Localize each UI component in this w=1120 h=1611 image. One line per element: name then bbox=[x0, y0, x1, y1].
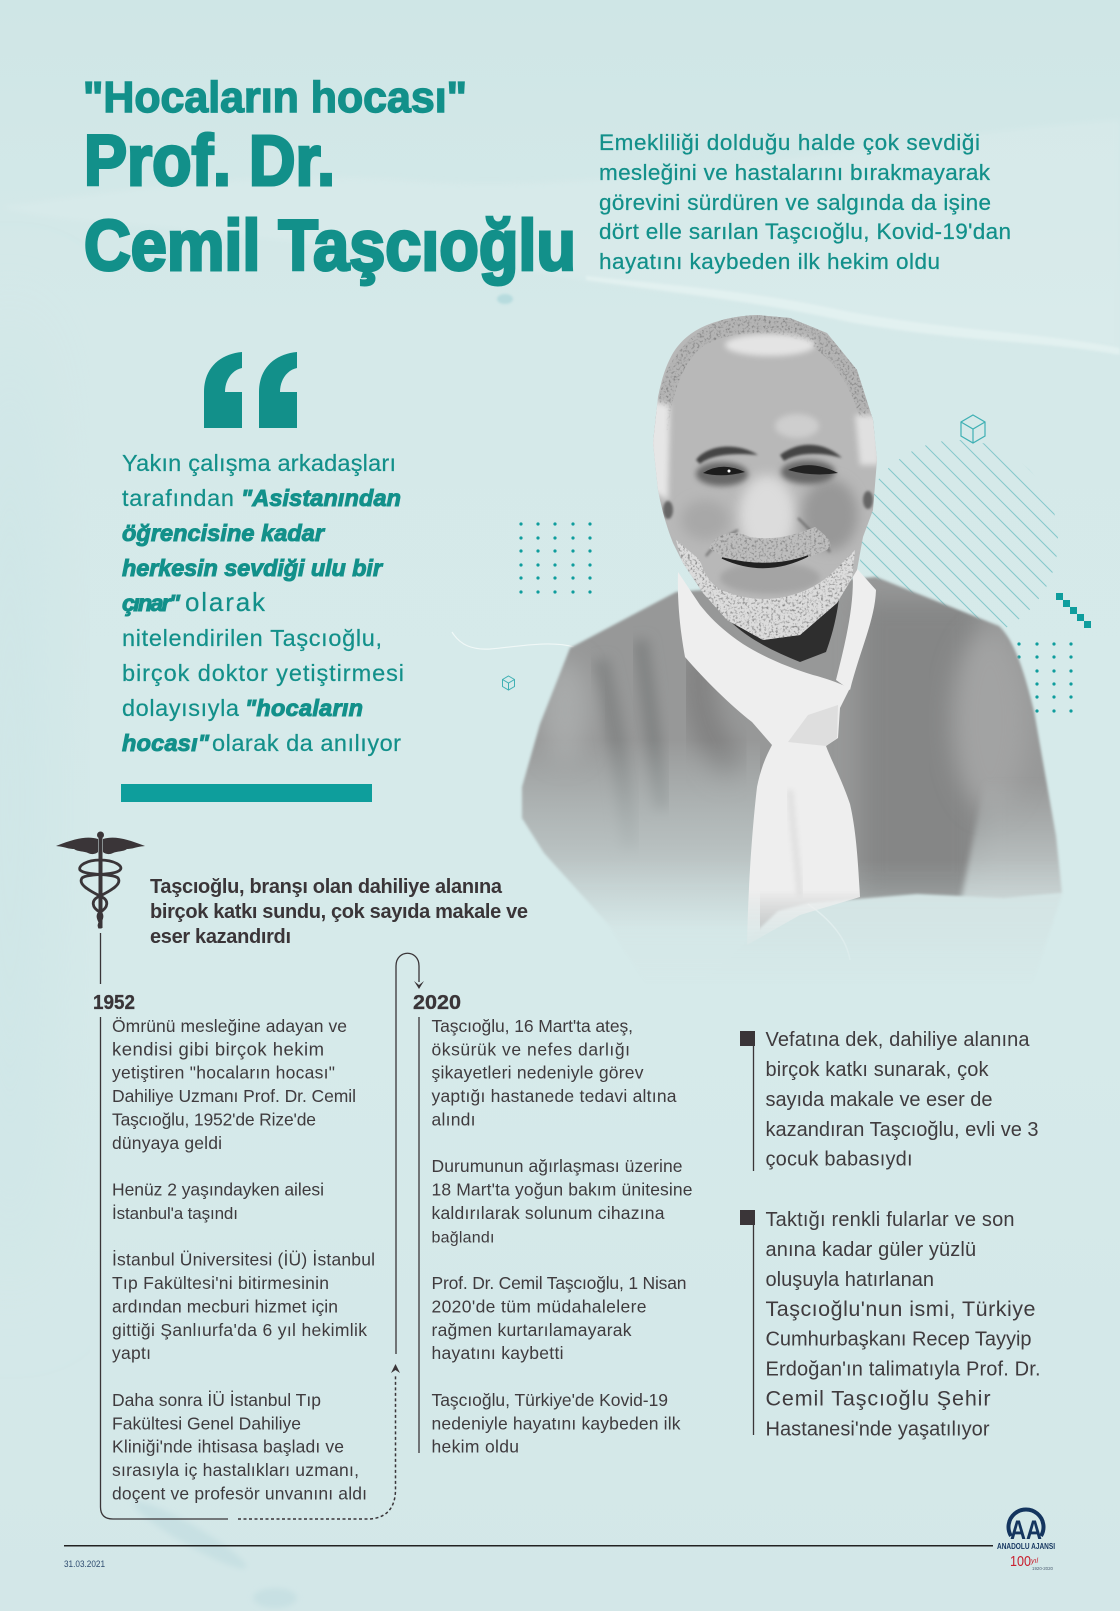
photo: hair bbox=[650, 312, 880, 440]
logo: Anadolu Ajansı: 1920-2020 bbox=[1032, 1566, 1053, 1571]
year 1952: 1952 bbox=[93, 992, 135, 1014]
quote text: öğrencisine kadar bbox=[122, 520, 326, 546]
text block: 2020 timeline: nedeniyle hayatını kaybeden ilk bbox=[432, 1413, 681, 1433]
teal bar bbox=[121, 784, 372, 802]
quote text: birçok doktor yetiştirmesi bbox=[122, 660, 404, 686]
title bbox=[83, 73, 576, 286]
quote text: hocası" bbox=[122, 730, 210, 756]
text block: 1952 timeline: gittiği Şanlıurfa'da 6 yıl hekimlik bbox=[112, 1320, 367, 1340]
logo: Anadolu Ajansı: yıl bbox=[1030, 1558, 1038, 1565]
bullet block: legacy: Cumhurbaşkanı Recep Tayyip bbox=[766, 1329, 1032, 1351]
arrow: down to 2020 bbox=[414, 981, 424, 989]
footer rule bbox=[64, 1545, 993, 1546]
timeline connector lines bbox=[100, 933, 419, 1519]
photo: eye sockets bbox=[696, 462, 748, 486]
photo: head bbox=[648, 312, 880, 650]
intro text: dört elle sarılan Taşcıoğlu, Kovid-19'dan bbox=[599, 219, 1011, 244]
quote text: "hocaların bbox=[245, 695, 363, 721]
quote text: nitelendirilen Taşcıoğlu, bbox=[122, 625, 382, 651]
photo: mouth bbox=[722, 556, 808, 568]
bullet block: family: kazandıran Taşcıoğlu, evli ve 3 bbox=[766, 1119, 1038, 1141]
photo: moustache bbox=[709, 527, 830, 565]
logo: Anadolu Ajansı: 100 bbox=[1010, 1553, 1031, 1570]
text block: 2020 timeline: hayatını kaybetti bbox=[432, 1343, 564, 1363]
bullet block: legacy: Taşcıoğlu'nun ismi, Türkiye bbox=[766, 1297, 1036, 1321]
intro text: mesleğini ve hastalarını bırakmayarak bbox=[599, 160, 991, 185]
logo: Anadolu Ajansı: ANADOLU AJANSI bbox=[997, 1541, 1055, 1551]
text block: 2020 timeline: Taşcıoğlu, Türkiye'de Kovid-19 bbox=[432, 1390, 668, 1410]
text block: 2020 timeline: yaptığı hastanede tedavi altına bbox=[432, 1086, 677, 1106]
text block: 2020 timeline: şikayetleri nedeniyle görev bbox=[432, 1063, 644, 1083]
quote text: çınar" bbox=[122, 590, 181, 616]
text block: 2020 timeline: 18 Mart'ta yoğun bakım ünitesine bbox=[432, 1180, 692, 1200]
text block: 1952 timeline: Henüz 2 yaşındayken ailesi bbox=[112, 1180, 324, 1200]
text block: 1952 timeline: Kliniği'nde ihtisasa başladı ve bbox=[112, 1437, 344, 1457]
subheading text bbox=[150, 876, 528, 948]
logo: Anadolu Ajansı: AA bbox=[1010, 1515, 1042, 1545]
text block: 1952 timeline: Tıp Fakültesi'ni bitirmesinin bbox=[112, 1273, 329, 1293]
text block: 1952 timeline: İstanbul Üniversitesi (İÜ) İstanbul bbox=[112, 1250, 375, 1270]
title name line 2: Cemil Taşcıoğlu bbox=[84, 207, 576, 286]
bullet block: family: birçok katkı sunarak, çok bbox=[766, 1059, 990, 1081]
text block: 2020 timeline: öksürük ve nefes darlığı bbox=[432, 1039, 630, 1059]
decor: thin white curve bbox=[452, 632, 574, 649]
text block: 1952 timeline: Ömrünü mesleğine adayan ve bbox=[112, 1016, 347, 1036]
photo: face base bbox=[653, 315, 877, 640]
text block: 1952 timeline: İstanbul'a taşındı bbox=[112, 1204, 238, 1223]
text block: 1952 timeline: sırasıyla iç hastalıkları uzmanı, bbox=[112, 1460, 359, 1480]
intro text: görevini sürdüren ve salgında da işine bbox=[599, 190, 991, 215]
arrow: up from dotted line bbox=[391, 1364, 400, 1373]
text block: 1952 timeline: Daha sonra İÜ İstanbul Tıp bbox=[112, 1390, 321, 1410]
decor: diagonal squares bbox=[1056, 593, 1091, 628]
quote text: tarafından bbox=[122, 485, 234, 511]
text block: 1952 timeline: kendisi gibi birçok hekim bbox=[112, 1038, 324, 1059]
bullet block: family bbox=[740, 1029, 1038, 1171]
quote text bbox=[122, 450, 404, 756]
bullet block: family: sayıda makale ve eser de bbox=[766, 1089, 992, 1111]
subheading with caduceus bbox=[56, 832, 528, 948]
text block: 2020 timeline: alındı bbox=[432, 1110, 476, 1130]
icon: caduceus bbox=[56, 832, 145, 928]
date: 31.03.2021 bbox=[64, 1559, 105, 1570]
text block: 2020 timeline: Prof. Dr. Cemil Taşcıoğlu, 1 Nisan bbox=[432, 1273, 686, 1293]
quote text: "Asistanından bbox=[241, 485, 401, 511]
text block: 1952 timeline: Taşcıoğlu, 1952'de Rize'de bbox=[112, 1110, 316, 1130]
intro text bbox=[599, 130, 1011, 274]
icon: small cube bbox=[502, 676, 514, 690]
decor: right dot grid bbox=[1017, 642, 1073, 713]
text block: 2020 timeline: Taşcıoğlu, 16 Mart'ta ateş, bbox=[432, 1016, 633, 1036]
photo: dark neck bbox=[722, 590, 840, 662]
photo: eyebrows bbox=[696, 447, 758, 464]
decor: left dot grid bbox=[519, 522, 592, 594]
intro text: Emekliliği dolduğu halde çok sevdiği bbox=[599, 130, 980, 155]
text block: 1952 timeline: dünyaya geldi bbox=[112, 1133, 222, 1153]
text block: 2020 timeline: 2020'de tüm müdahalelere bbox=[432, 1296, 646, 1316]
photo: nose and smile creases bbox=[706, 518, 830, 556]
text block: 2020 timeline: rağmen kurtarılamayarak bbox=[432, 1320, 632, 1340]
photo: ear shadows bbox=[663, 501, 673, 519]
text block: 1952 timeline: ardından mecburi hizmet için bbox=[112, 1296, 338, 1316]
photo: sweater and arms bbox=[520, 576, 1062, 940]
bullet block: legacy: Erdoğan'ın talimatıyla Prof. Dr. bbox=[766, 1359, 1040, 1381]
bullet block: family: Vefatına dek, dahiliye alanına bbox=[766, 1029, 1030, 1051]
decor: diagonal hatch circle bbox=[860, 440, 1058, 628]
photo: beard bbox=[676, 540, 855, 650]
title kicker: "Hocaların hocası" bbox=[83, 73, 467, 122]
photo: eyes bbox=[703, 467, 745, 475]
subheading text: Taşcıoğlu, branşı olan dahiliye alanına bbox=[150, 876, 503, 898]
text block: 2020 timeline: hekim oldu bbox=[432, 1437, 519, 1457]
text block: 1952 timeline: yaptı bbox=[112, 1343, 151, 1363]
text block: 1952 timeline: Fakültesi Genel Dahiliye bbox=[112, 1413, 301, 1433]
text block: 2020 timeline: bağlandı bbox=[432, 1229, 494, 1246]
text block: 1952 timeline: yetiştiren "hocaların hocası" bbox=[112, 1063, 335, 1083]
text block: 1952 timeline bbox=[112, 1016, 375, 1503]
bullet block: legacy: oluşuyla hatırlanan bbox=[766, 1269, 934, 1291]
text block: 2020 timeline: kaldırılarak solunum cihazına bbox=[432, 1203, 665, 1223]
quote text: olarak da anılıyor bbox=[212, 730, 401, 756]
bullet block: legacy: Hastanesi'nde yaşatılıyor bbox=[766, 1418, 990, 1440]
year 2020: 2020 bbox=[413, 992, 461, 1014]
bullet block: family: çocuk babasıydı bbox=[766, 1149, 912, 1171]
quote text: olarak bbox=[185, 587, 266, 617]
subheading text: birçok katkı sundu, çok sayıda makale ve bbox=[150, 901, 528, 923]
photo: Cemil Taşcıoğlu portrait bbox=[500, 312, 1100, 1010]
title name line 1: Prof. Dr. bbox=[84, 122, 335, 201]
text block: 1952 timeline: doçent ve profesör unvanını aldı bbox=[112, 1483, 367, 1503]
subheading text: eser kazandırdı bbox=[150, 926, 291, 948]
photo: scarf bbox=[678, 563, 876, 945]
bullet block: legacy bbox=[740, 1209, 1040, 1440]
icon: large cube bbox=[961, 415, 985, 443]
quote text: Yakın çalışma arkadaşları bbox=[122, 450, 396, 476]
text block: 2020 timeline bbox=[432, 1016, 692, 1457]
quote text: dolayısıyla bbox=[122, 695, 240, 721]
text block: 1952 timeline: Dahiliye Uzmanı Prof. Dr. Cemil bbox=[112, 1086, 356, 1106]
bullet block: legacy: Taktığı renkli fularlar ve son bbox=[766, 1209, 1014, 1231]
intro text: hayatını kaybeden ilk hekim oldu bbox=[599, 249, 940, 274]
bullet block: legacy: Cemil Taşcıoğlu Şehir bbox=[766, 1386, 990, 1410]
photo: chin skin bbox=[720, 562, 820, 594]
text block: 2020 timeline: Durumunun ağırlaşması üzerine bbox=[432, 1156, 682, 1176]
logo: Anadolu Ajansı bbox=[997, 1509, 1055, 1571]
quote marks bbox=[204, 352, 297, 428]
quote text: herkesin sevdiği ulu bir bbox=[122, 555, 384, 581]
bullet block: legacy: anına kadar güler yüzlü bbox=[766, 1239, 976, 1261]
